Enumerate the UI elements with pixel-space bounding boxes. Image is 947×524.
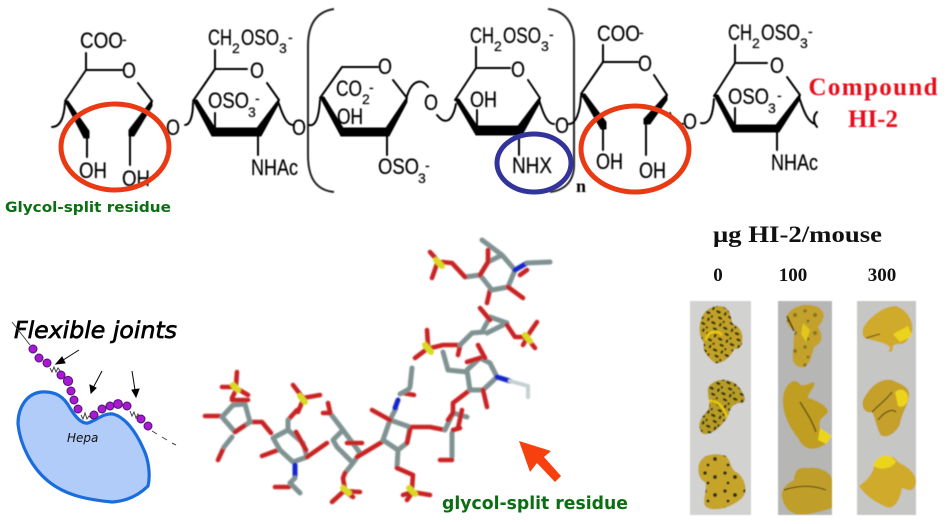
sugar ring 6: 3: [800, 35, 808, 51]
sugar ring 4: 3: [541, 38, 549, 54]
sugar ring 2: -: [255, 90, 260, 106]
liver middle: [863, 380, 909, 436]
linkage oxygen: O: [555, 113, 569, 138]
label: glycol-split residue (lower): glycol-split residue: [442, 493, 628, 514]
label: Compound HI-2: Compound: [808, 74, 938, 101]
sugar ring 4: [455, 23, 554, 178]
panel: chemical structure of compound HI-2: [52, 9, 818, 196]
photo column: 0 μg: [690, 301, 751, 515]
label: Compound HI-2: HI-2: [848, 106, 898, 133]
arrow: orange, points to glycol-split residue: [519, 441, 561, 482]
sugar ring 5: glycol-split residue: OH: [639, 158, 666, 183]
label: Hepa: Hepa: [67, 431, 98, 445]
sugar ring 2: -: [288, 29, 293, 45]
sugar ring 2: OSO: [241, 25, 279, 50]
sugar ring 3: 3: [418, 170, 426, 186]
sugar ring 2: 2: [232, 40, 240, 56]
sugar ring 3: CO: [336, 76, 362, 101]
residue F: [460, 290, 537, 358]
sugar ring 5: glycol-split residue: OH: [596, 149, 623, 174]
sugar ring 4: O: [511, 57, 525, 82]
sugar ring 3: -: [369, 79, 374, 95]
sugar ring 2: 3: [248, 104, 256, 120]
label: dose 100: 100: [779, 265, 807, 286]
residue C: [307, 403, 382, 502]
residue D: [372, 368, 445, 500]
heading: dose: μg HI-2/mouse: [713, 222, 882, 247]
highlight: red ellipse, right glycol-split residue: [581, 106, 689, 192]
sugar ring 1: glycol-split residue: OH: [79, 158, 107, 183]
liver top: [699, 306, 743, 363]
sugar ring 2: [185, 25, 298, 180]
liver middle: [699, 380, 745, 434]
linkage oxygen: O: [683, 109, 697, 134]
panel: 3D molecular model: [205, 240, 550, 502]
sugar ring 6: O: [770, 53, 784, 78]
photo column: 300 μg: [857, 301, 916, 515]
sugar ring 2: O: [250, 58, 264, 83]
sugar ring 1: glycol-split residue: O: [122, 58, 136, 83]
residue B: [262, 385, 320, 493]
linkage oxygen: O: [424, 90, 438, 115]
liver top: [787, 305, 824, 367]
sugar ring 6: OSO: [728, 84, 769, 109]
sugar ring 6: -: [808, 23, 813, 39]
sugar ring 2: 3: [279, 40, 287, 56]
sugar ring 4: OSO: [503, 23, 541, 48]
liver bottom: [698, 454, 745, 509]
sugar ring 2: CH: [208, 25, 232, 50]
sugar ring 6: 3: [768, 100, 776, 116]
sugar ring 6: NHAc: [771, 150, 818, 175]
sugar ring 1: glycol-split residue: -: [122, 31, 127, 47]
liver bottom: [859, 456, 916, 508]
sugar ring 6: CH: [728, 20, 752, 45]
sugar ring 6: [701, 20, 818, 175]
liver bottom: [782, 468, 832, 515]
photo column: 100 μg: [778, 301, 832, 515]
chain of beads: [12, 322, 176, 445]
sugar ring 3: [309, 54, 456, 186]
sugar ring 4: OH: [470, 87, 497, 112]
sugar ring 3: -: [425, 157, 430, 173]
highlight: red ellipse, left glycol-split residue: [61, 104, 169, 190]
sugar ring 1: glycol-split residue: OH: [122, 166, 150, 191]
sugar ring 1: glycol-split residue: COO: [80, 28, 123, 53]
sugar ring 4: CH: [470, 23, 494, 48]
left bracket: [308, 9, 334, 192]
heading: Flexible joints: Flexible joints: [14, 318, 177, 344]
linkage oxygen: O: [292, 115, 306, 140]
label: glycol-split residue (upper): Glycol-split residue: [5, 200, 171, 216]
sugar ring 2: OSO: [208, 88, 249, 113]
arrow: joint 3: [132, 371, 139, 397]
sugar ring 5: glycol-split residue: -: [639, 24, 644, 40]
sugar ring 6: 2: [752, 35, 760, 51]
blob: Hepa target: [18, 392, 149, 502]
label: dose 300: 300: [868, 265, 896, 286]
sugar ring 4: NHX: [512, 153, 552, 178]
residue A: [205, 372, 271, 460]
sugar ring 5: glycol-split residue: O: [638, 51, 652, 76]
sugar ring 3: OH: [337, 104, 363, 129]
sugar ring 5: glycol-split residue: [569, 21, 683, 183]
residue E: [415, 330, 528, 407]
sugar ring 4: -: [549, 26, 554, 42]
label: dose 0: 0: [713, 265, 723, 286]
sugar ring 6: OSO: [761, 20, 800, 45]
right bracket with repeat n: [548, 9, 586, 196]
sugar ring 5: glycol-split residue: COO: [597, 21, 640, 46]
sugar ring 2: NHAc: [251, 155, 298, 180]
arrow: joint 1: [56, 350, 79, 364]
liver middle: [783, 381, 829, 449]
sugar ring 3: OSO: [378, 154, 419, 179]
residue G: [430, 240, 550, 298]
sugar ring 6: -: [777, 87, 782, 103]
highlight: blue ellipse around NHX: [497, 134, 571, 192]
arrow: joint 2: [90, 371, 102, 393]
liver top: [863, 306, 912, 352]
linkage oxygen: O: [166, 115, 180, 140]
glycol-split residue in the model: [440, 390, 470, 460]
sugar ring 1: glycol-split residue: [52, 28, 152, 191]
panel: flexible joints schematic: [12, 318, 177, 502]
right bracket with repeat n: n: [576, 176, 586, 196]
sugar ring 3: O: [378, 54, 392, 79]
sugar ring 3: 2: [362, 91, 370, 107]
sugar ring 4: 2: [494, 38, 502, 54]
